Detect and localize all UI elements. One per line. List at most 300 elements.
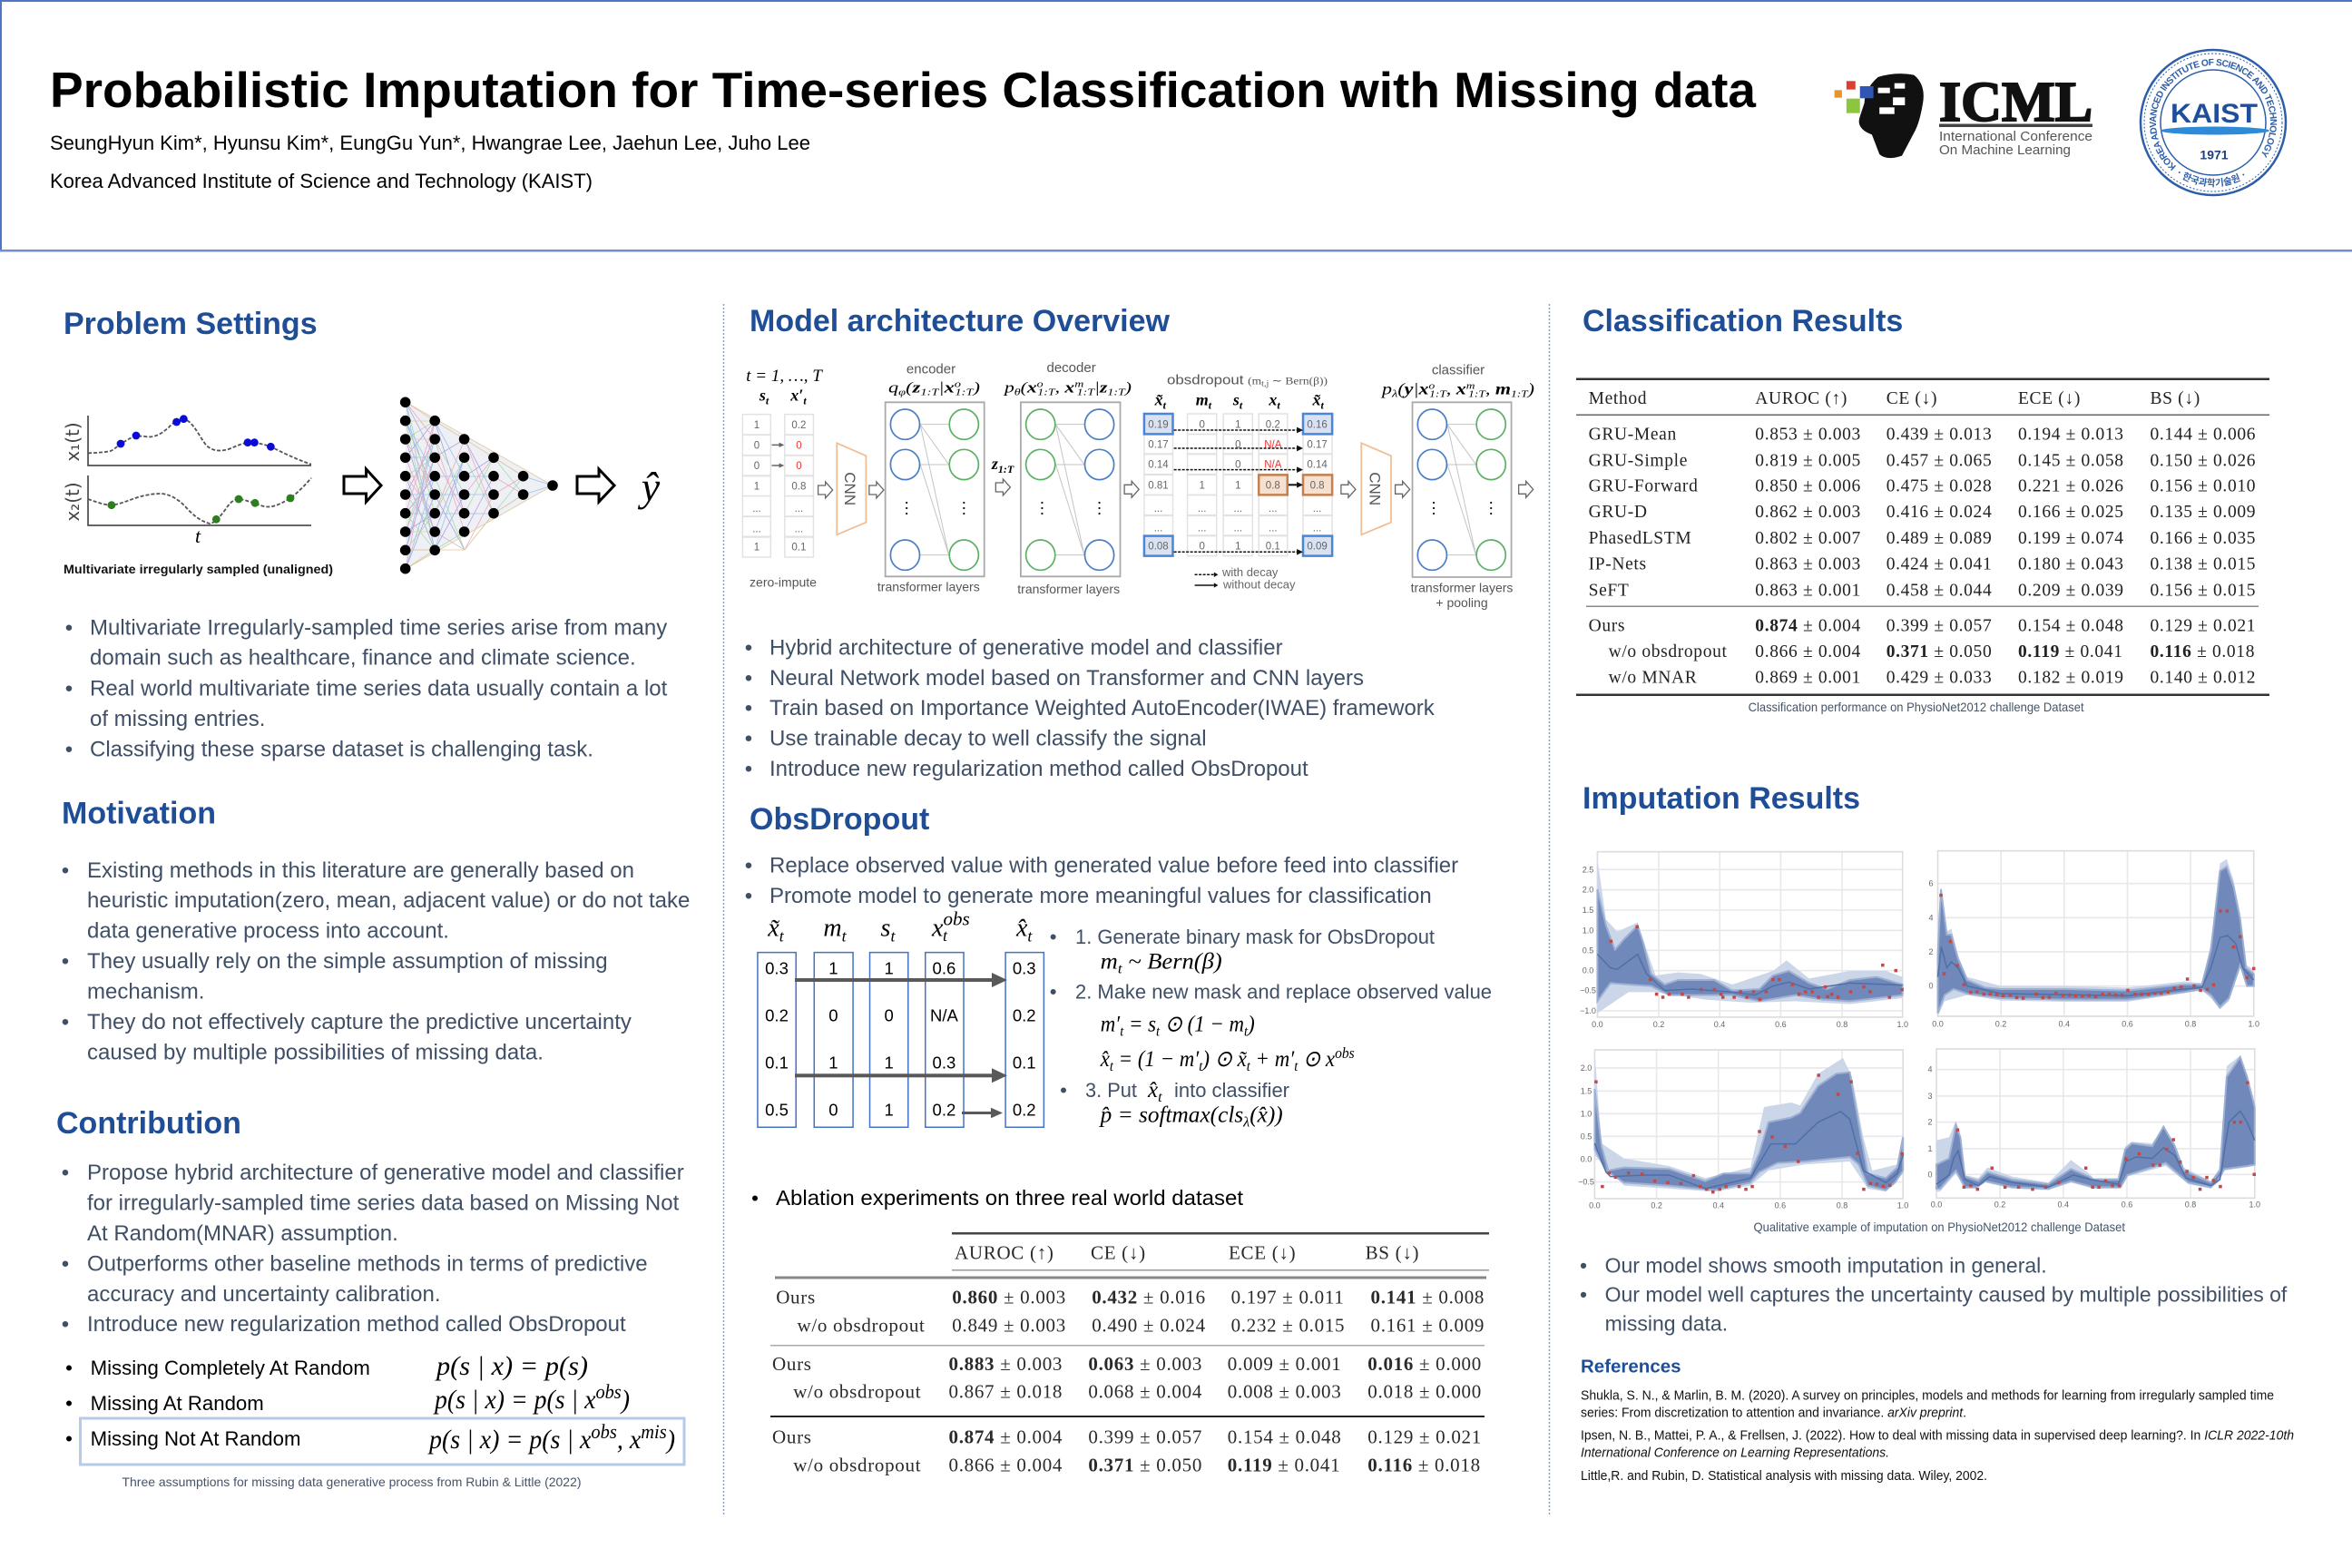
table: classification performance: 0.850 ± 0.006 (1755, 477, 1861, 496)
bullets: imputation: Our model shows smooth imputation in general. (1605, 1253, 2047, 1277)
diagram: architecture: x (943, 379, 955, 397)
table: classification performance: AUROC (↑) (1755, 389, 1847, 408)
obsdropout steps: 2. Make new mask and replace observed value (1075, 981, 1492, 1004)
diagram: architecture: ... (1313, 504, 1321, 514)
diagram: architecture: ... (1154, 504, 1162, 514)
bullets: imputation: • (1580, 1283, 1587, 1307)
table: classification performance: 0.209 ± 0.039 (2018, 582, 2124, 601)
diagram: architecture (742, 360, 1534, 610)
table: obsdropout example: 0 (828, 1005, 838, 1024)
diagram: architecture: x (1269, 391, 1277, 409)
table: classification performance: 0.166 ± 0.025 (2018, 503, 2124, 522)
reference list: Little,R. and Rubin, D. Statistical analysis with missing data. Wiley, 2002. (1581, 1469, 1987, 1484)
obsdropout steps: λ (1242, 1115, 1250, 1131)
table: classification performance: GRU-Forward (1589, 477, 1698, 496)
diagram: architecture: m (1466, 380, 1475, 391)
table: ablation experiments: 0.141 ± 0.008 (1370, 1287, 1485, 1308)
heading: References (1581, 1357, 1681, 1377)
chart: irregular time series x1 and x2: x₁(t) (62, 422, 83, 462)
bullets: problem: • (65, 615, 73, 640)
diagram: architecture: 0.1 (791, 543, 806, 554)
diagram: architecture: 0 (1235, 460, 1241, 471)
diagram: architecture: θ (1014, 387, 1021, 398)
table: ablation experiments: w/o obsdropout (797, 1314, 926, 1336)
table: classification performance: 0.457 ± 0.065 (1886, 451, 1992, 470)
table: obsdropout example: t (842, 927, 848, 946)
diagram: architecture: x̃ (1155, 391, 1163, 409)
diagram: architecture: z (911, 379, 921, 397)
chart: imputation example 4: 3 (1927, 1092, 1933, 1101)
table: classification performance: 0.416 ± 0.024 (1886, 503, 1992, 522)
table caption: Classification performance on PhysioNet2012 challenge Dataset (1749, 700, 2084, 714)
obsdropout steps (1050, 926, 1492, 1131)
table: classification performance: 0.489 ± 0.089 (1886, 529, 1992, 548)
table: ablation experiments: 0.197 ± 0.011 (1231, 1287, 1344, 1308)
chart: imputation example 2: 1.0 (2249, 1019, 2259, 1028)
chart: imputation example 1: 1.0 (1583, 926, 1593, 935)
table: classification performance: CE (↓) (1886, 389, 1937, 408)
obsdropout steps: t (1294, 1059, 1298, 1074)
table: obsdropout example: 0.2 (1013, 1005, 1036, 1024)
bullets: motivation: data generative process into account. (87, 918, 449, 944)
diagram: architecture: transformer layers (877, 580, 980, 594)
diagram: architecture: φ (898, 387, 906, 398)
diagram: architecture: x (1063, 379, 1075, 397)
table: classification performance: 0.180 ± 0.043 (2018, 555, 2124, 574)
heading: Imputation Results (1583, 781, 1860, 816)
table: classification performance: GRU-Mean (1589, 425, 1677, 444)
table: classification performance: 0.458 ± 0.044 (1886, 582, 1992, 601)
bullets: motivation (62, 858, 690, 1065)
obsdropout steps: ⊙ (1 − m (1160, 1013, 1244, 1037)
chart: imputation example 4: 0.2 (1994, 1200, 2005, 1210)
chart: imputation example 1: 2.0 (1583, 886, 1593, 895)
icon: ICML logo (1835, 72, 2092, 158)
missingness assumptions: ) (620, 1385, 630, 1415)
chart: imputation example 1: −0.5 (1580, 986, 1596, 995)
table: classification performance: 0.156 ± 0.015 (2151, 582, 2256, 601)
chart: imputation example 1: 0.2 (1653, 1020, 1664, 1029)
heading: ObsDropout (750, 802, 929, 837)
table: classification performance: w/o MNAR (1609, 668, 1697, 687)
chart: imputation example 3: 0.0 (1589, 1200, 1601, 1210)
table: ablation experiments: 0.866 ± 0.004 (949, 1455, 1063, 1476)
diagram: architecture: 0.14 (1307, 460, 1328, 471)
diagram: architecture: t (1277, 399, 1280, 412)
affiliation: Korea Advanced Institute of Science and Technology (KAIST) (50, 170, 593, 192)
icon: ICML logo: International Conference (1939, 129, 2092, 144)
bullets: contribution: accuracy and uncertainty calibration. (87, 1282, 441, 1307)
table: classification performance: 0.371 ± 0.050 (1886, 642, 1992, 662)
arrow (344, 469, 381, 502)
chart: imputation example 3: 1.0 (1897, 1200, 1908, 1210)
table: classification performance: 0.129 ± 0.021 (2151, 616, 2256, 635)
diagram: architecture: ) (1526, 379, 1534, 398)
missingness assumptions: ) (665, 1425, 675, 1455)
diagram: architecture: ( (1021, 379, 1029, 397)
obsdropout steps: into classifier (1174, 1079, 1290, 1102)
diagram: architecture: CNN (1367, 472, 1384, 505)
bullets: architecture: • (745, 696, 752, 720)
table: obsdropout example: 1 (884, 1100, 894, 1119)
missingness assumptions: Missing Not At Random (91, 1427, 300, 1450)
table: obsdropout example: 0 (828, 1100, 838, 1119)
obsdropout steps: (x̂)) (1250, 1103, 1283, 1128)
diagram: architecture: 0.16 (1307, 419, 1328, 430)
table: obsdropout example: 0.1 (1013, 1053, 1036, 1072)
table: obsdropout example: 0.3 (1013, 958, 1036, 977)
obsdropout steps: t (1199, 1059, 1203, 1074)
header banner (0, 0, 2352, 252)
chart: imputation example 2: 0.8 (2185, 1019, 2196, 1028)
chart: irregular time series x1 and x2: t (195, 524, 201, 547)
diagram: architecture: 0 (1235, 439, 1241, 450)
diagram: architecture: t (803, 395, 807, 407)
chart: imputation example 3 (1578, 1050, 1908, 1210)
bullets: architecture: • (745, 636, 752, 661)
diagram: architecture: x (1026, 379, 1037, 397)
table: classification performance: Method (1589, 389, 1647, 408)
table: ablation experiments: Ours (776, 1287, 816, 1308)
chart: imputation example 3: 1.5 (1581, 1086, 1592, 1095)
diagram: architecture: | (1094, 379, 1100, 397)
panel: contribution (56, 1106, 684, 1489)
table: obsdropout example: 0.2 (1013, 1100, 1036, 1119)
chart: imputation example 3: 0.8 (1837, 1200, 1847, 1210)
diagram: architecture: s (1233, 391, 1240, 409)
table: classification performance: IP-Nets (1589, 555, 1647, 574)
diagram: architecture: ... (1198, 524, 1206, 534)
diagram: architecture: x (1455, 379, 1466, 397)
chart: imputation example 2: 6 (1928, 879, 1934, 888)
bullets: architecture: • (745, 757, 752, 781)
diagram: architecture: ... (1234, 504, 1242, 514)
missingness assumptions: mis (641, 1420, 667, 1443)
diagram: architecture: ( (1397, 379, 1406, 398)
diagram: architecture: ... (795, 504, 803, 514)
diagram: architecture: q (888, 379, 897, 397)
bullets: contribution (62, 1161, 684, 1337)
bullets: contribution: for irregularly-sampled time series data based on Missing Not (87, 1191, 680, 1216)
diagram: architecture: 0.19 (1148, 419, 1169, 430)
bullets: obsdropout (745, 854, 1458, 908)
table: ablation experiments: 0.009 ± 0.001 (1228, 1353, 1341, 1375)
table: classification performance: 0.154 ± 0.048 (2018, 616, 2124, 635)
table: ablation experiments: 0.849 ± 0.003 (952, 1314, 1066, 1336)
table: classification performance: 0.138 ± 0.015 (2151, 555, 2256, 574)
table: ablation experiments: 0.063 ± 0.003 (1088, 1353, 1202, 1375)
table: classification performance: SeFT (1589, 582, 1629, 601)
obsdropout steps: ⊙ x (1298, 1047, 1335, 1072)
chart: imputation example 4: 0.4 (2058, 1200, 2069, 1210)
diagram: architecture: without decay (1222, 577, 1296, 591)
table: classification performance: 0.853 ± 0.003 (1755, 425, 1861, 444)
table: obsdropout example: 1 (828, 958, 838, 977)
bullets: motivation: • (62, 858, 69, 883)
chart: imputation example 3: 0.2 (1651, 1200, 1662, 1210)
table: classification performance: w/o obsdropout (1609, 642, 1728, 662)
diagram: architecture: 1 (754, 543, 760, 554)
chart: imputation example 4: 1.0 (2249, 1200, 2260, 1210)
bullets: motivation: They do not effectively capture the predictive uncertainty (87, 1010, 632, 1034)
table: classification performance: 0.150 ± 0.026 (2151, 451, 2256, 470)
table: classification performance: 0.166 ± 0.035 (2151, 529, 2256, 548)
table: classification performance: GRU-D (1589, 503, 1648, 522)
diagram: architecture: m (1495, 379, 1511, 397)
table: ablation experiments: CE (↓) (1091, 1241, 1146, 1263)
diagram: architecture: classifier (1432, 362, 1485, 377)
table: ablation experiments: 0.116 ± 0.018 (1367, 1455, 1481, 1476)
chart: imputation example 2: 0.6 (2122, 1019, 2133, 1028)
table: obsdropout example: t (943, 926, 948, 945)
chart: imputation example 2: 4 (1928, 913, 1934, 922)
diagram: architecture: 0.2 (791, 420, 806, 431)
bullets: motivation: mechanism. (87, 980, 204, 1004)
diagram: architecture: 1:T (1077, 387, 1095, 398)
diagram: architecture: t (1209, 399, 1212, 412)
table: classification performance: 0.802 ± 0.007 (1755, 529, 1861, 548)
table: ablation experiments: 0.490 ± 0.024 (1092, 1314, 1206, 1336)
bullets: problem: Multivariate Irregularly-sampled time series arise from many (90, 615, 667, 640)
bullets: architecture: Use trainable decay to well classify the signal (769, 727, 1207, 751)
table: classification performance: 0.819 ± 0.005 (1755, 451, 1861, 470)
table: obsdropout example (758, 908, 1044, 1127)
diagram: architecture: ... (795, 524, 803, 535)
callout: MNAR highlight (80, 1418, 684, 1465)
obsdropout steps: x̂ (1101, 1047, 1111, 1072)
chart: imputation example 3: −0.5 (1578, 1178, 1594, 1187)
diagram: architecture: with decay (1221, 565, 1279, 579)
table: classification performance: 0.866 ± 0.004 (1755, 642, 1861, 662)
chart: imputation example 1: 1.5 (1583, 906, 1593, 915)
table: obsdropout example: x (932, 915, 943, 943)
bullets: imputation: Our model well captures the uncertainty caused by multiple possibilities of (1605, 1283, 2288, 1307)
icon: KAIST seal: 1971 (2200, 147, 2229, 162)
bullets: motivation: They usually rely on the simple assumption of missing (87, 949, 608, 974)
table: classification performance: 0.119 ± 0.041 (2018, 642, 2123, 662)
obsdropout steps: = s (1123, 1013, 1156, 1037)
heading: Model architecture Overview (750, 304, 1171, 338)
missingness assumptions: Missing At Random (91, 1392, 264, 1415)
table: obsdropout example: 0.2 (765, 1005, 789, 1024)
missingness assumptions: , x (617, 1425, 642, 1455)
table: ablation experiments: BS (↓) (1366, 1241, 1419, 1263)
missingness assumptions: • (65, 1392, 73, 1415)
table: obsdropout example: 1 (884, 1053, 894, 1072)
chart: irregular time series x1 and x2: x₂(t) (62, 482, 83, 522)
bullets: architecture: Train based on Importance Weighted AutoEncoder(IWAE) framework (769, 696, 1436, 720)
table: classification performance: ECE (↓) (2018, 389, 2081, 408)
diagram: architecture: ... (1198, 504, 1206, 514)
table: classification performance: 0.424 ± 0.041 (1886, 555, 1992, 574)
heading: Contribution (56, 1106, 241, 1141)
reference list: series: From discretization to attention and invariance. arXiv preprint. (1581, 1406, 1966, 1421)
heading: Motivation (62, 797, 216, 831)
table: ablation experiments: 0.161 ± 0.009 (1370, 1314, 1485, 1336)
bullets: imputation (1580, 1253, 2288, 1336)
diagram: architecture: ... (752, 504, 761, 514)
icon: ICML logo: On Machine Learning (1939, 142, 2071, 158)
diagram: architecture: 0.8 (791, 481, 806, 492)
table: obsdropout example: N/A (930, 1005, 958, 1024)
diagram: architecture: x′ (790, 387, 803, 405)
table: ablation experiments: AUROC (↑) (955, 1241, 1054, 1263)
chart caption: Multivariate irregularly sampled (unaligned) (64, 562, 333, 576)
table: obsdropout example: 0.1 (765, 1053, 789, 1072)
diagram: architecture: ) (972, 379, 980, 397)
bullets: contribution: Introduce new regularization method called ObsDropout (87, 1312, 626, 1337)
diagram: architecture: 0 (1199, 419, 1205, 430)
diagram: architecture: + pooling (1436, 595, 1488, 610)
chart: imputation example 1 (1580, 852, 1908, 1029)
chart: imputation example 4 (1927, 1049, 2260, 1210)
arrow (577, 469, 614, 502)
obsdropout steps: 3. Put (1085, 1079, 1137, 1102)
diagram: architecture: 0.2 (1266, 419, 1280, 430)
obsdropout steps: • (1050, 926, 1057, 948)
chart: imputation example 1: 0.5 (1583, 946, 1593, 955)
table: classification performance: 0.194 ± 0.013 (2018, 425, 2124, 444)
panel: imputation results (1578, 781, 2288, 1336)
diagram: architecture: ... (1269, 504, 1278, 514)
obsdropout steps: t (1244, 1024, 1249, 1040)
diagram: architecture: 1:T (1511, 388, 1529, 399)
chart: imputation example 1: 0.8 (1837, 1020, 1847, 1029)
table: ablation experiments: 0.232 ± 0.015 (1231, 1314, 1345, 1336)
chart: imputation example 4: 0 (1927, 1170, 1933, 1179)
table: classification performance: GRU-Simple (1589, 451, 1688, 470)
bullets: problem: domain such as healthcare, finance and climate science. (90, 646, 636, 671)
diagram: architecture: N/A (1264, 439, 1282, 450)
icon: KAIST seal: · 한국과학기술원 · (2178, 172, 2245, 187)
missingness assumptions: obs (591, 1420, 617, 1443)
diagram: architecture: 0.1 (1266, 542, 1280, 553)
diagram: architecture: , (1485, 379, 1495, 397)
bullets: contribution: • (62, 1312, 69, 1337)
chart: imputation example 2: 0 (1928, 982, 1934, 991)
table: ablation experiments: w/o obsdropout (793, 1455, 921, 1476)
diagram: architecture: y|x (1405, 379, 1427, 397)
diagram: architecture: x̃ (1313, 391, 1321, 409)
chart: imputation example 3: 0.5 (1581, 1132, 1592, 1141)
obsdropout steps: ) (1246, 1013, 1255, 1037)
authors: SeungHyun Kim*, Hyunsu Kim*, EungGu Yun*, Hwangrae Lee, Jaehun Lee, Juho Lee (50, 132, 810, 154)
reference list: Ipsen, N. B., Mattei, P. A., & Frellsen, J. (2022). How to deal with missing data in supervised deep learning?. In ICLR 2022-10th (1581, 1429, 2294, 1444)
bullet: ablation intro: • (751, 1187, 759, 1210)
diagram: architecture: 0.8 (1310, 480, 1325, 491)
table: ablation experiments: w/o obsdropout (793, 1381, 921, 1403)
chart: imputation example 2 (1928, 851, 2259, 1028)
chart: imputation example 1: 2.5 (1583, 865, 1593, 874)
table: classification performance: 0.863 ± 0.001 (1755, 582, 1861, 601)
bullets: architecture: Neural Network model based on Transformer and CNN layers (769, 666, 1364, 691)
diagram: architecture: CNN (841, 472, 858, 505)
chart: imputation example 1: 0.0 (1592, 1020, 1603, 1029)
diagram: architecture: m (1074, 379, 1083, 390)
chart: imputation example 1: 0.4 (1714, 1020, 1725, 1029)
diagram: architecture: t (1163, 399, 1167, 412)
obsdropout steps: 1. Generate binary mask for ObsDropout (1075, 926, 1435, 948)
table: classification performance: 0.182 ± 0.019 (2018, 668, 2124, 687)
diagram: architecture: | (938, 379, 945, 397)
table: obsdropout example: 0.2 (933, 1100, 956, 1119)
table: ablation experiments: 0.860 ± 0.003 (952, 1287, 1066, 1308)
missingness assumptions: Missing Completely At Random (91, 1357, 370, 1379)
diagram: architecture: 1:T (955, 387, 975, 398)
table: classification performance: 0.221 ± 0.026 (2018, 477, 2124, 496)
diagram: architecture: ... (1154, 524, 1162, 534)
diagram: architecture: ∼ Bern(β)) (1269, 374, 1328, 387)
table: ablation experiments: 0.154 ± 0.048 (1228, 1426, 1341, 1448)
bullets: obsdropout: Replace observed value with generated value before feed into classifier (769, 854, 1458, 878)
bullets: contribution: At Random(MNAR) assumption. (87, 1221, 398, 1246)
chart: imputation example 4: 0.6 (2122, 1200, 2132, 1210)
charts caption: Qualitative example of imputation on PhysioNet2012 challenge Dataset (1753, 1220, 2125, 1234)
obsdropout steps: t (1156, 1024, 1161, 1040)
table: ablation experiments: 0.883 ± 0.003 (949, 1353, 1063, 1375)
bullets: obsdropout: • (745, 884, 752, 908)
table: classification performance: 0.439 ± 0.013 (1886, 425, 1992, 444)
diagram: architecture: 1 (1235, 542, 1241, 553)
bullets: problem: Classifying these sparse dataset is challenging task. (90, 737, 593, 761)
bullet: ablation intro: Ablation experiments on three real world dataset (776, 1186, 1244, 1210)
chart: imputation example 2: 0.4 (2059, 1019, 2070, 1028)
chart: imputation example 3: 0.4 (1712, 1200, 1724, 1210)
obsdropout steps: m (1101, 950, 1117, 975)
table: classification performance: 0.429 ± 0.033 (1886, 668, 1992, 687)
diagram: architecture: 1:T (1037, 387, 1056, 398)
bullets: architecture (745, 636, 1436, 781)
table: obsdropout example: x̂ (1016, 915, 1027, 943)
diagram: architecture: decoder (1046, 360, 1096, 376)
obsdropout steps: + m′ (1250, 1047, 1295, 1072)
bullets: contribution: • (62, 1252, 69, 1276)
obsdropout steps: t (1118, 962, 1122, 977)
output label y-hat: ŷ (638, 464, 661, 510)
diagram: architecture: 0.17 (1148, 439, 1169, 450)
reference list: International Conference on Learning Representations. (1581, 1446, 1889, 1461)
panel: model architecture (742, 304, 1534, 781)
chart: irregular time series x1 and x2 (62, 415, 311, 547)
obsdropout steps: t (1120, 1024, 1124, 1040)
bullets: problem: of missing entries. (90, 707, 265, 731)
diagram: architecture: 1:T (920, 387, 940, 398)
caption: Three assumptions for missing data generative process from Rubin & Little (2022) (122, 1475, 581, 1489)
obsdropout steps: m′ (1101, 1013, 1122, 1037)
table: obsdropout example: m (823, 915, 842, 943)
panel: references (1581, 1357, 2294, 1484)
panel: problem settings (62, 307, 668, 761)
bullets: motivation: caused by multiple possibilities of missing data. (87, 1040, 544, 1065)
diagram: architecture: p (1382, 379, 1390, 397)
bullets: architecture: • (745, 666, 752, 691)
table: ablation experiments: 0.874 ± 0.004 (949, 1426, 1063, 1448)
table: obsdropout example: s (881, 915, 890, 943)
diagram: architecture: transformer layers (1411, 580, 1513, 594)
table: ablation experiments: 0.016 ± 0.000 (1367, 1353, 1482, 1375)
icon: KAIST seal (2140, 49, 2287, 196)
table: classification performance: 0.144 ± 0.006 (2151, 425, 2256, 444)
diagram: architecture: 0 (754, 461, 760, 472)
table: ablation experiments: 0.018 ± 0.000 (1367, 1381, 1482, 1403)
chart: imputation example 3: 0.6 (1775, 1200, 1786, 1210)
diagram: architecture: o (1037, 379, 1044, 390)
title: Probabilistic Imputation for Time-series Classification with Missing data (50, 62, 1756, 118)
bullets: problem (65, 615, 668, 761)
diagram: architecture: 0.17 (1307, 439, 1328, 450)
diagram: architecture: m (1196, 391, 1209, 409)
missingness assumptions: • (65, 1357, 73, 1379)
